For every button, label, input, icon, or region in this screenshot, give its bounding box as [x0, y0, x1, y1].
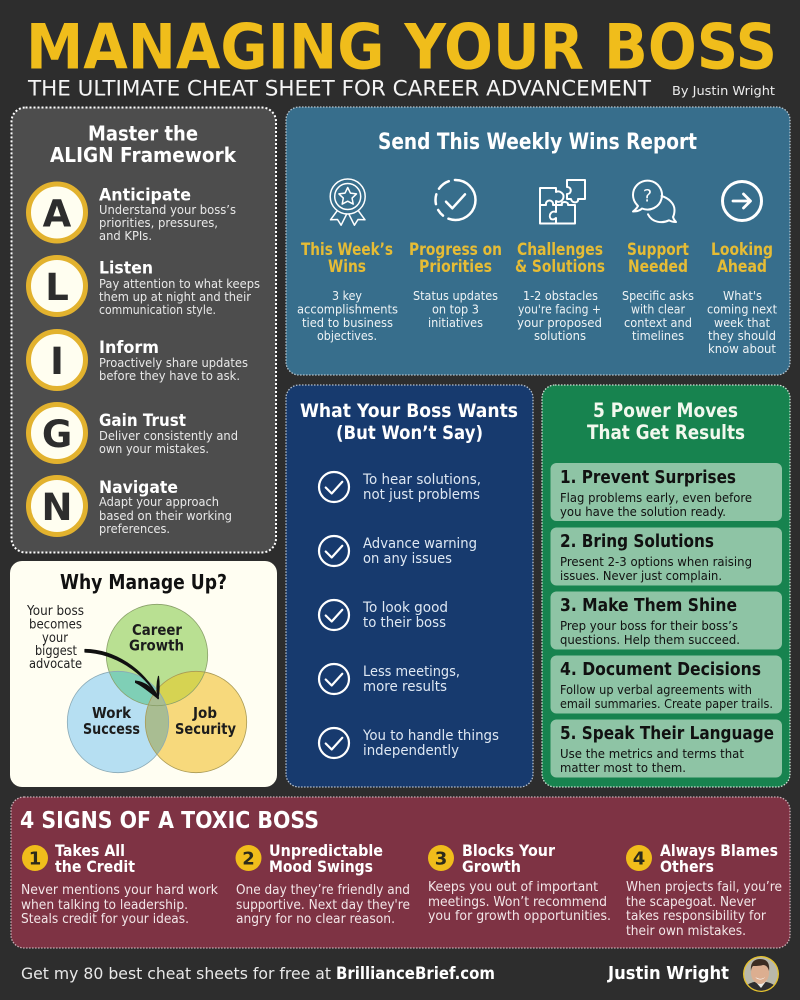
column: Looking Ahead: What's — [723, 288, 762, 303]
column: This Week's Wins: tied to business — [302, 315, 393, 330]
column: Support Needed: context and — [624, 315, 692, 330]
item: look good: To look good — [362, 600, 448, 616]
item: less meetings: more results — [363, 679, 447, 695]
sign 1: when talking to leadership. — [21, 898, 188, 913]
sign 4: takes responsibility for — [626, 909, 767, 924]
sign 1: the Credit — [55, 857, 135, 876]
column: This Week's Wins: objectives. — [317, 328, 377, 343]
column: Looking Ahead: know about — [708, 341, 776, 356]
icon: medal — [330, 179, 365, 225]
sign 3: Keeps you out of important — [428, 880, 598, 895]
sign 3: you for growth opportunities. — [428, 909, 611, 924]
card: document decisions: email summaries. Create paper trails. — [560, 696, 773, 711]
item: look good: to their boss — [363, 615, 446, 631]
item: L Listen: them up at night and their — [99, 289, 252, 304]
heading: 4 signs of a toxic boss: 4 SIGNS OF A TOXIC BOSS — [20, 808, 319, 834]
panel: ALIGN framework — [12, 108, 276, 552]
item: N Navigate: Navigate — [99, 478, 178, 498]
card: prevent surprises: you have the solution ready. — [560, 504, 726, 519]
item: solutions: To hear solutions, — [362, 472, 481, 488]
footer call to action — [21, 964, 495, 984]
item: I Inform: I — [50, 340, 64, 383]
column: Looking Ahead: Looking — [711, 240, 773, 259]
column: Challenges and Solutions: & Solutions — [515, 257, 605, 276]
icon: progress check — [436, 180, 476, 220]
icon: arrow circle — [722, 182, 762, 220]
item: L Listen — [28, 258, 260, 317]
heading: Master the ALIGN Framework — [50, 122, 237, 167]
card: make them shine: 3. Make Them Shine — [560, 595, 737, 616]
callout: your boss becomes your biggest advocate: becomes — [29, 618, 82, 632]
item: independently — [319, 728, 499, 759]
subtitle: THE ULTIMATE CHEAT SHEET FOR CAREER ADVANCEMENT — [27, 76, 651, 100]
item: L Listen: Listen — [99, 258, 153, 278]
item: advance warning: on any issues — [363, 551, 452, 567]
item: A Anticipate: Understand your boss’s — [99, 202, 236, 217]
card: bring solutions: issues. Never just complain. — [560, 568, 722, 583]
item: solutions: not just problems — [363, 487, 480, 503]
card: prevent surprises: Flag problems early, even before — [560, 490, 752, 505]
item: I Inform: Proactively share updates — [99, 355, 248, 370]
column: Progress on Priorities: Status updates — [413, 288, 498, 303]
sign 1: Takes All — [55, 841, 125, 860]
column: Looking Ahead: they should — [708, 328, 776, 343]
card: make them shine: questions. Help them succeed. — [560, 632, 740, 647]
column: Progress on Priorities: Progress on — [409, 240, 502, 259]
item: A Anticipate: priorities, pressures, — [99, 215, 218, 230]
column: Looking Ahead: coming next — [707, 302, 777, 316]
sign 1 — [21, 841, 218, 927]
card: bring solutions: 2. Bring Solutions — [560, 531, 714, 552]
sign 4: the scapegoat. Never — [626, 895, 757, 910]
column: Challenges and Solutions: solutions — [534, 328, 586, 343]
sign 4: Always Blames — [660, 841, 778, 860]
item: G Gain Trust — [28, 404, 238, 462]
column: Looking Ahead: Ahead — [717, 257, 767, 276]
callout: your boss becomes your biggest advocate — [26, 604, 84, 672]
item: A Anticipate: and KPIs. — [99, 228, 152, 243]
icon: author portrait — [743, 956, 779, 992]
venn diagram: Career — [132, 621, 183, 639]
sign 4: When projects fail, you’re — [626, 880, 782, 895]
item: A Anticipate — [28, 184, 236, 243]
column: Support Needed: Specific asks — [622, 288, 694, 303]
panel: power moves — [542, 385, 790, 787]
column: Challenges and Solutions: you're facing + — [518, 302, 601, 316]
item: advance warning — [319, 536, 477, 567]
column: Progress on Priorities — [409, 180, 502, 330]
column: Support Needed: timelines — [632, 328, 684, 343]
column: Support Needed — [622, 181, 694, 343]
item: N Navigate: preferences. — [99, 521, 170, 536]
column: Progress on Priorities: Priorities — [419, 257, 492, 276]
heading: Send This Weekly Wins Report: Send This Weekly Wins Report — [378, 130, 697, 155]
column: Challenges and Solutions: Challenges — [517, 240, 603, 259]
venn diagram: Work — [92, 704, 132, 722]
card: speak their language: Use the metrics and terms that — [560, 746, 744, 761]
column: Progress on Priorities: on top 3 — [432, 302, 479, 316]
sign 3: 3 — [435, 848, 447, 870]
sign 2: supportive. Next day they're — [236, 898, 410, 913]
icon: puzzle pieces — [540, 180, 585, 224]
byline: By Justin Wright — [672, 83, 775, 98]
sign 4: their own mistakes. — [626, 924, 746, 939]
item: G Gain Trust: Deliver consistently and — [99, 428, 238, 443]
panel: weekly wins report — [286, 107, 790, 375]
item: independently: You to handle things — [362, 728, 499, 744]
card: make them shine: Prep your boss for their boss’s — [560, 618, 738, 633]
venn diagram: Job — [192, 704, 217, 722]
icon: chat bubbles — [633, 181, 676, 222]
author name: Justin Wright — [606, 963, 729, 984]
column: Looking Ahead: week that — [714, 315, 770, 330]
item: N Navigate: Adapt your approach — [99, 494, 219, 509]
sign 3 — [428, 841, 611, 924]
footer call to action: Get my 80 best cheat sheets for free at — [21, 964, 331, 983]
icon: chat bubbles: ? — [643, 186, 652, 206]
column: Challenges and Solutions — [515, 180, 605, 343]
heading: What Your Boss Wants: (But Won’t Say) — [336, 422, 483, 444]
sign 1: Never mentions your hard work — [21, 883, 218, 898]
column: This Week's Wins: This Week’s — [301, 240, 393, 259]
sign 2 — [236, 841, 410, 927]
sign 3: Growth — [462, 857, 521, 876]
item: G Gain Trust: Gain Trust — [99, 411, 186, 431]
sign 1: Steals credit for your ideas. — [21, 912, 189, 927]
sign 2: Unpredictable — [269, 841, 383, 860]
heading: What Your Boss Wants: What Your Boss Wants — [300, 400, 518, 422]
callout: your boss becomes your biggest advocate: advocate — [29, 657, 82, 672]
item: N Navigate — [28, 478, 232, 536]
sign 2: angry for no clear reason. — [236, 912, 395, 927]
item: solutions — [319, 472, 481, 503]
venn diagram: Growth — [129, 636, 184, 654]
item: G Gain Trust: G — [42, 413, 72, 456]
item: G Gain Trust: own your mistakes. — [99, 441, 209, 456]
sign 1: 1 — [29, 848, 41, 870]
sign 2: One day they’re friendly and — [236, 883, 410, 898]
item: L Listen: L — [45, 266, 69, 309]
column: Progress on Priorities: initiatives — [428, 315, 483, 330]
item: A Anticipate: A — [43, 192, 72, 236]
heading: What Your Boss Wants — [300, 400, 518, 444]
item: I Inform: before they have to ask. — [99, 368, 240, 383]
item: A Anticipate: Anticipate — [99, 186, 191, 206]
item: N Navigate: N — [42, 486, 72, 529]
card: document decisions: Follow up verbal agreements with — [560, 682, 752, 697]
card: bring solutions: Present 2-3 options when raising — [560, 554, 752, 569]
heading: 5 Power Moves: 5 Power Moves — [593, 399, 738, 422]
heading: Master the ALIGN Framework: ALIGN Framework — [50, 143, 237, 167]
column: This Week's Wins — [297, 179, 398, 343]
card: speak their language — [550, 720, 782, 778]
card: prevent surprises: 1. Prevent Surprises — [560, 467, 736, 488]
item: L Listen: communication style. — [99, 302, 216, 317]
panel: toxic boss — [11, 797, 790, 948]
sign 4: 4 — [633, 848, 645, 870]
heading: 5 Power Moves: That Get Results — [587, 421, 745, 444]
column: Support Needed: Support — [627, 240, 689, 259]
column: Support Needed: Needed — [628, 257, 688, 276]
panel: Why Manage Up — [10, 561, 277, 787]
card: prevent surprises — [550, 463, 782, 521]
item: L Listen: Pay attention to what keeps — [99, 276, 260, 291]
column: This Week's Wins: accomplishments — [297, 302, 398, 316]
item: less meetings: Less meetings, — [363, 664, 460, 680]
callout: your boss becomes your biggest advocate: your — [42, 631, 69, 646]
item: look good — [319, 600, 448, 631]
item: independently: independently — [363, 743, 459, 759]
heading: 5 Power Moves — [587, 399, 745, 444]
sign 3: meetings. Won’t recommend — [428, 895, 607, 910]
sign 2: Mood Swings — [269, 857, 373, 876]
callout: your boss becomes your biggest advocate: Your boss — [26, 604, 84, 619]
card: document decisions: 4. Document Decisions — [560, 659, 761, 680]
heading: Why Manage Up?: Why Manage Up? — [60, 570, 227, 594]
arrow — [85, 650, 159, 699]
item: less meetings — [319, 664, 460, 695]
sign 4: Others — [660, 857, 714, 876]
card: bring solutions — [550, 528, 782, 586]
venn diagram — [67, 604, 247, 773]
column: This Week's Wins: 3 key — [332, 288, 363, 303]
item: advance warning: Advance warning — [363, 536, 477, 552]
item: I Inform: Inform — [99, 338, 159, 358]
sign 2: 2 — [242, 848, 255, 870]
column: Challenges and Solutions: 1-2 obstacles — [523, 288, 598, 303]
panel: what your boss wants — [286, 385, 533, 787]
column: Challenges and Solutions: your proposed — [517, 315, 602, 330]
column: Support Needed: with clear — [631, 302, 686, 316]
card: document decisions — [550, 656, 782, 714]
venn diagram: Security — [175, 720, 236, 738]
column: This Week's Wins: Wins — [328, 257, 366, 276]
footer call to action: BrillianceBrief.com — [336, 964, 495, 984]
card: speak their language: matter most to them. — [560, 760, 686, 775]
sign 3: Blocks Your — [462, 841, 555, 860]
item: N Navigate: based on their working — [99, 508, 232, 523]
sign 4 — [626, 841, 782, 939]
item: I Inform — [28, 332, 248, 388]
heading: Master the ALIGN Framework: Master the — [88, 122, 198, 146]
venn diagram: Success — [83, 720, 140, 738]
column: Looking Ahead — [707, 182, 777, 356]
callout: your boss becomes your biggest advocate: biggest — [35, 644, 77, 659]
card: make them shine — [550, 592, 782, 650]
